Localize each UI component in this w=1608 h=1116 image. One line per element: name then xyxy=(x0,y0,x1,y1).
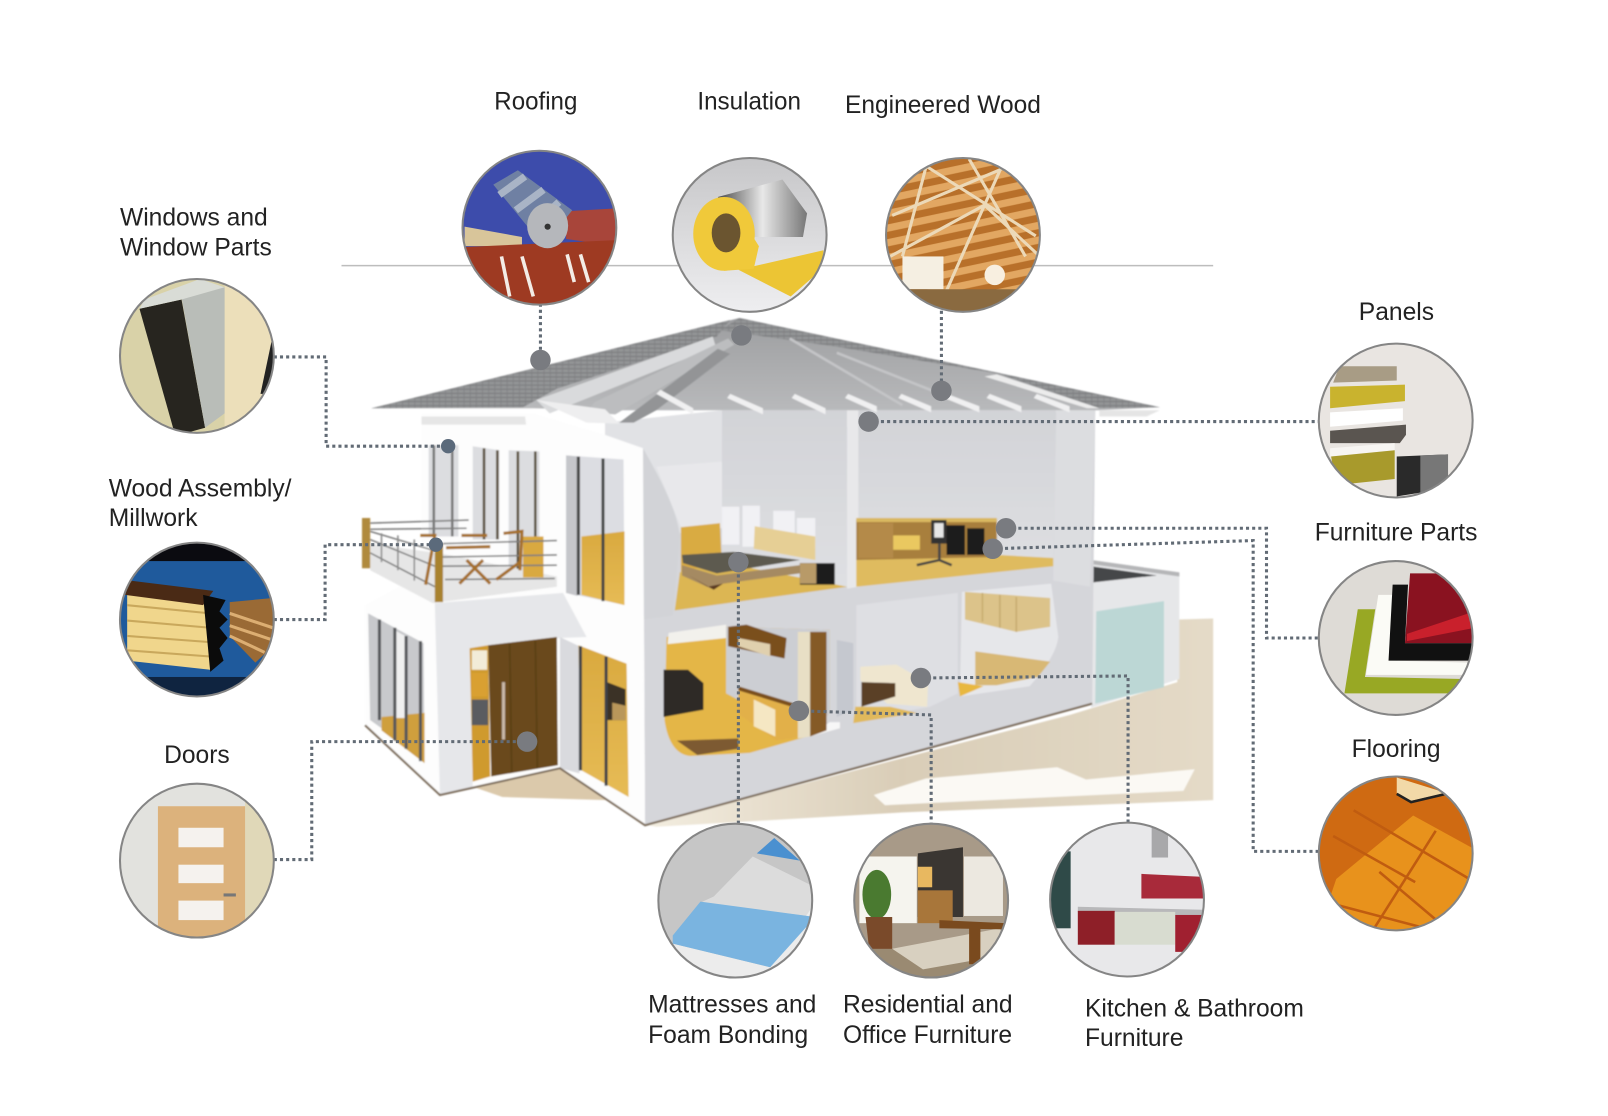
photo: wood assembly xyxy=(118,541,277,700)
white left block xyxy=(365,413,645,825)
label: wood assembly / millwork: Millwork xyxy=(109,505,198,532)
label: kitchen and bathroom furniture: Kitchen & Bathroom xyxy=(1085,996,1304,1023)
label: wood assembly / millwork: Wood Assembly/ xyxy=(109,475,292,502)
connector: mattresses xyxy=(737,562,740,824)
photo: doors xyxy=(118,782,277,941)
balcony xyxy=(362,518,557,603)
front wall xyxy=(643,410,1095,825)
photo: kitchen xyxy=(1048,821,1207,980)
label: windows and window parts: Window Parts xyxy=(120,234,272,261)
photo: engineered wood xyxy=(883,156,1042,315)
upper interior xyxy=(605,410,1095,620)
label: engineered wood: Engineered Wood xyxy=(845,92,1041,119)
entrance door xyxy=(470,637,558,782)
ground floor left windows xyxy=(368,613,425,763)
ground and shadow xyxy=(473,619,1213,827)
house illustration xyxy=(362,318,1213,827)
marker dots xyxy=(429,325,1016,752)
ground floor right window xyxy=(578,645,629,797)
connector: windows xyxy=(274,357,448,446)
office furniture xyxy=(856,518,997,565)
photo: roofing xyxy=(459,149,618,308)
connector: panels xyxy=(869,420,1319,423)
base edge xyxy=(365,704,1092,825)
label: windows and window parts: Windows and xyxy=(120,205,268,232)
photo: residential furniture xyxy=(852,821,1011,980)
photo: furniture parts xyxy=(1316,558,1477,717)
soffit and recessed wall xyxy=(421,416,587,795)
photo: mattresses xyxy=(656,821,815,980)
label: residential and office furniture: Residential and xyxy=(843,991,1013,1018)
label: roofing: Roofing xyxy=(494,89,577,116)
label: flooring: Flooring xyxy=(1352,736,1441,763)
lower right room xyxy=(853,584,1058,723)
upper windows xyxy=(429,445,625,605)
connector: roofing xyxy=(539,304,542,360)
connector: wood assembly xyxy=(274,545,436,620)
photo: windows and window parts xyxy=(118,277,277,436)
label: doors: Doors xyxy=(164,742,230,769)
label: panels: Panels xyxy=(1359,299,1434,326)
label: furniture parts: Furniture Parts xyxy=(1315,520,1477,547)
photo: flooring xyxy=(1316,773,1475,933)
connector: flooring xyxy=(993,541,1319,851)
roof xyxy=(371,318,1160,424)
label: residential and office furniture: Office Furniture xyxy=(843,1022,1012,1049)
photo: panels xyxy=(1316,341,1475,500)
bedroom furniture xyxy=(682,506,835,590)
lower left room xyxy=(664,625,853,756)
connector: doors xyxy=(274,742,527,860)
garage xyxy=(1091,560,1179,708)
connector: kitchen furniture xyxy=(921,676,1128,824)
label: mattresses and foam bonding: Mattresses and xyxy=(648,991,816,1018)
connector: furniture parts xyxy=(1006,528,1319,638)
label: mattresses and foam bonding: Foam Bonding xyxy=(648,1022,808,1049)
label: insulation: Insulation xyxy=(697,89,801,116)
photo: insulation xyxy=(670,156,829,315)
connector: engineered wood xyxy=(940,311,943,391)
connector: residential furniture xyxy=(799,711,931,824)
label: kitchen and bathroom furniture: Furniture xyxy=(1085,1025,1183,1052)
